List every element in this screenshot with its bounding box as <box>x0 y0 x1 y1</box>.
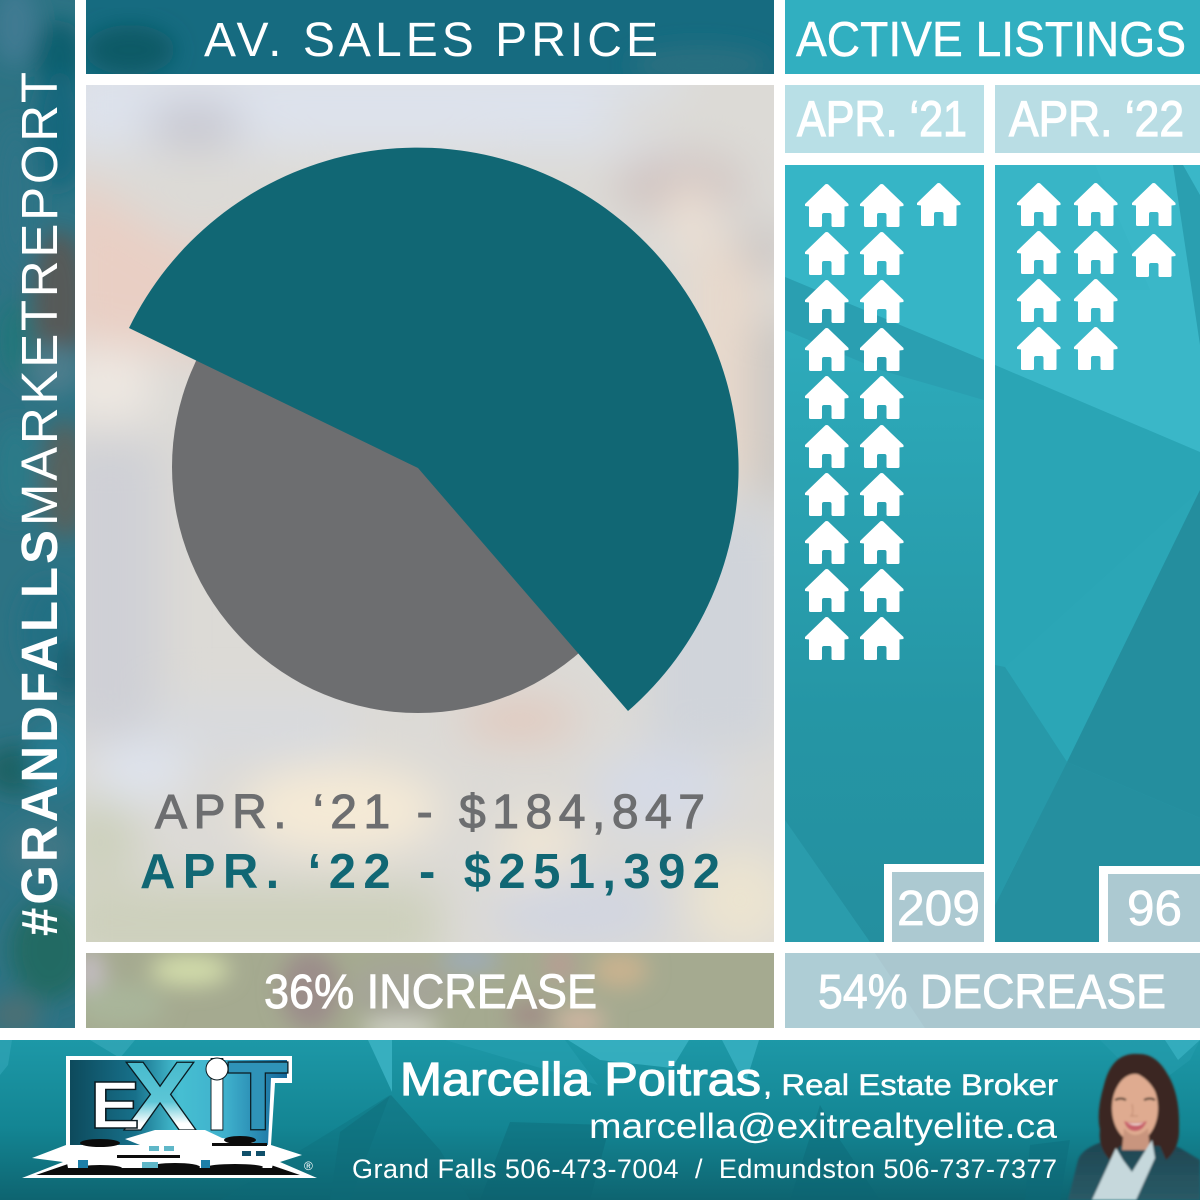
heading: average sales price <box>86 0 774 74</box>
panel: April 2022 listings <box>995 165 1200 942</box>
agent portrait <box>1068 1054 1200 1200</box>
panel: average sales price chart and blurred photo <box>86 85 774 942</box>
hashtag text: #GRANDFALLS <box>11 530 68 936</box>
agent name and title: Marcella Poitras <box>400 1053 761 1105</box>
callout: 54% decrease <box>785 953 1200 1028</box>
panel: footer contact band <box>0 1040 1200 1200</box>
hashtag text: MARKETREPORT <box>11 72 68 526</box>
pie slice: April 2021 <box>172 221 664 713</box>
phone numbers: Grand Falls 506-473-7004 / Edmundston 506-737-7377 <box>352 1154 1057 1184</box>
pie chart <box>129 148 739 713</box>
logo: EXIT Realty: E <box>90 1068 140 1143</box>
count April 2021 <box>884 864 984 942</box>
count April 2021: 209 <box>897 882 980 936</box>
panel: April 2021 listings <box>785 165 984 942</box>
count April 2022 <box>1099 866 1200 942</box>
email: marcella@exitrealtyelite.ca <box>589 1107 1058 1146</box>
label: April 2021 listings: APR. ‘21 <box>797 91 967 147</box>
callout: 36% increase: 36% INCREASE <box>264 966 597 1019</box>
house icons <box>805 183 960 660</box>
logo: EXIT Realty: i <box>205 1041 229 1151</box>
callout: 36% increase <box>86 953 774 1028</box>
heading: active listings: ACTIVE LISTINGS <box>796 13 1186 67</box>
hashtag text <box>11 72 68 936</box>
count April 2022: 96 <box>1127 882 1182 936</box>
heading: average sales price: AV. SALES PRICE <box>204 14 658 67</box>
agent name and title <box>400 1053 1058 1105</box>
logo: EXIT Realty: X <box>123 1041 197 1151</box>
logo: EXIT Realty: T <box>227 1041 289 1151</box>
pie slice: April 2022 <box>129 148 739 711</box>
logo: EXIT Realty: ® <box>304 1159 313 1173</box>
callout: 54% decrease: 54% DECREASE <box>818 966 1166 1019</box>
panel: sidebar hashtag <box>0 0 75 1028</box>
price April 2022: APR. ‘22 - $251,392 <box>140 845 720 899</box>
price April 2021: APR. ‘21 - $184,847 <box>155 786 705 839</box>
house icons <box>1017 183 1176 370</box>
agent name and title: , Real Estate Broker <box>763 1069 1058 1102</box>
logo: EXIT Realty <box>22 1041 317 1178</box>
